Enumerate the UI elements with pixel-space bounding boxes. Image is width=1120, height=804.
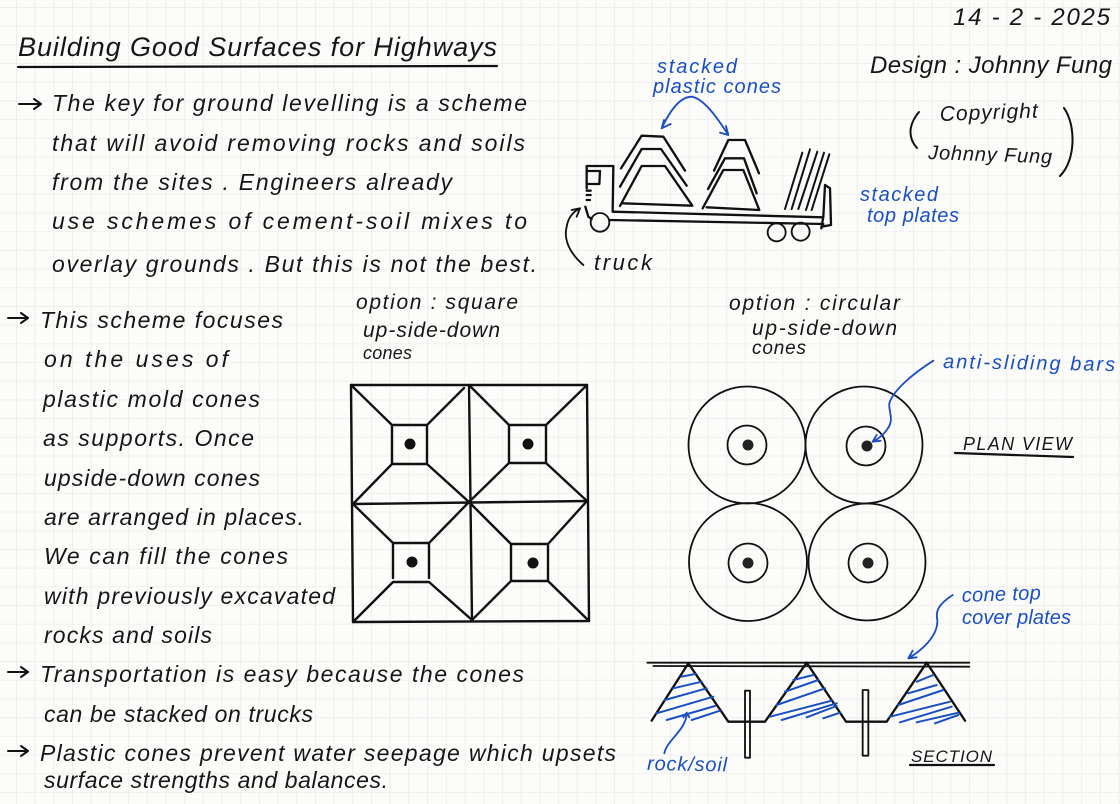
text block: plastic mold cones: are arranged in places. [44, 504, 304, 530]
arrow: stacked plastic cones [662, 97, 728, 135]
text block: water seepage: surface strengths and balances. [44, 767, 388, 793]
text block: key for ground levelling: that will avoid removing rocks and soils [52, 130, 526, 156]
cone profile [652, 663, 965, 722]
text block: water seepage: Plastic cones prevent water seepage which upsets [40, 740, 616, 766]
text block: plastic mold cones: This scheme focuses [40, 307, 284, 333]
text block: plastic mold cones: upside-down cones [44, 465, 260, 491]
text block: transportation [8, 661, 524, 727]
label: square option [356, 291, 518, 363]
label: plan view: PLAN VIEW [963, 434, 1074, 454]
label: stacked top plates: stacked [860, 184, 939, 206]
copyright note [910, 100, 1073, 176]
text block: plastic mold cones: with previously excavated [44, 583, 336, 609]
label: cone top cover plates [961, 582, 1071, 629]
label: circular option: option : circular [729, 292, 901, 315]
label: section: SECTION [911, 747, 993, 766]
label: stacked top plates: top plates [867, 205, 959, 227]
arrow: truck [566, 208, 583, 265]
text block: key for ground levelling: use schemes of cement-soil mixes to [52, 208, 527, 234]
date: 14 - 2 - 2025 [953, 4, 1111, 31]
arrow bullet [8, 746, 28, 756]
label: circular option [729, 292, 901, 359]
text block: plastic mold cones: as supports. Once [43, 425, 254, 451]
circular cone: top right [806, 386, 922, 504]
arrow: rock and soil [664, 713, 689, 753]
text block: plastic mold cones: on the uses of [44, 346, 231, 372]
label: square option: option : square [356, 291, 518, 314]
label: rock/soil: rock/soil [647, 753, 728, 776]
designer credit: Design : Johnny Fung [870, 52, 1113, 79]
cover plates [647, 663, 969, 667]
circular cone: top left [688, 386, 806, 504]
circular cone: bottom left [689, 503, 807, 621]
square cone: top right [469, 385, 587, 502]
label: stacked top plates [860, 184, 959, 227]
square cones plan [351, 385, 589, 622]
circular cones plan [688, 386, 926, 621]
stacked top plates [785, 149, 829, 210]
text block: key for ground levelling [19, 90, 537, 277]
text block: transportation: Transportation is easy because the cones [40, 661, 524, 687]
arrow bullet [19, 99, 41, 109]
label: square option: cones [363, 343, 412, 363]
arrow bullet [8, 667, 28, 677]
rock and soil hatching [657, 674, 958, 723]
label: circular option: up-side-down [752, 317, 897, 340]
stacked cones, left [620, 136, 692, 206]
square cone: bottom right [469, 501, 589, 621]
label: square option: up-side-down [363, 319, 500, 342]
label: truck: truck [594, 250, 653, 275]
anti-sliding bars [745, 690, 868, 758]
label: stacked plastic cones: plastic cones [652, 76, 781, 98]
outer frame and divisions [351, 385, 589, 622]
circular cone: bottom right [808, 504, 926, 620]
text block: plastic mold cones: We can fill the cones [44, 543, 288, 569]
label: cone top cover plates: cover plates [962, 607, 1071, 629]
copyright note: Copyright [939, 100, 1039, 126]
truck bed [609, 185, 831, 228]
arrow: cover plates [908, 595, 953, 658]
truck cab [585, 166, 613, 219]
truck diagram [566, 97, 831, 265]
text block: key for ground levelling: The key for ground levelling is a scheme [52, 90, 527, 116]
square cone: bottom left [353, 502, 472, 622]
label: anti-sliding bars: anti-sliding bars [943, 351, 1115, 376]
text block: key for ground levelling: overlay grounds . But this is not the best. [52, 251, 537, 277]
label: stacked plastic cones [652, 56, 781, 98]
text block: water seepage [8, 740, 616, 793]
label: cone top cover plates: cone top [961, 582, 1041, 607]
text block: plastic mold cones: plastic mold cones [42, 386, 260, 412]
copyright note: Johnny Fung [927, 142, 1053, 168]
square cone: top left [351, 385, 469, 504]
text block: transportation: can be stacked on trucks [44, 701, 314, 727]
text block: plastic mold cones [8, 307, 336, 648]
text block: key for ground levelling: from the sites . Engineers already [52, 169, 454, 195]
text block: plastic mold cones: rocks and soils [44, 622, 212, 648]
stacked cones, right [703, 140, 759, 210]
truck wheels [591, 213, 810, 241]
label: stacked plastic cones: stacked [657, 56, 738, 78]
arrow: anti-sliding bars [873, 361, 933, 442]
section diagram [647, 595, 969, 758]
arrow bullet [8, 313, 28, 323]
title: Building Good Surfaces for Highways [18, 32, 497, 62]
label: circular option: cones [752, 338, 806, 359]
